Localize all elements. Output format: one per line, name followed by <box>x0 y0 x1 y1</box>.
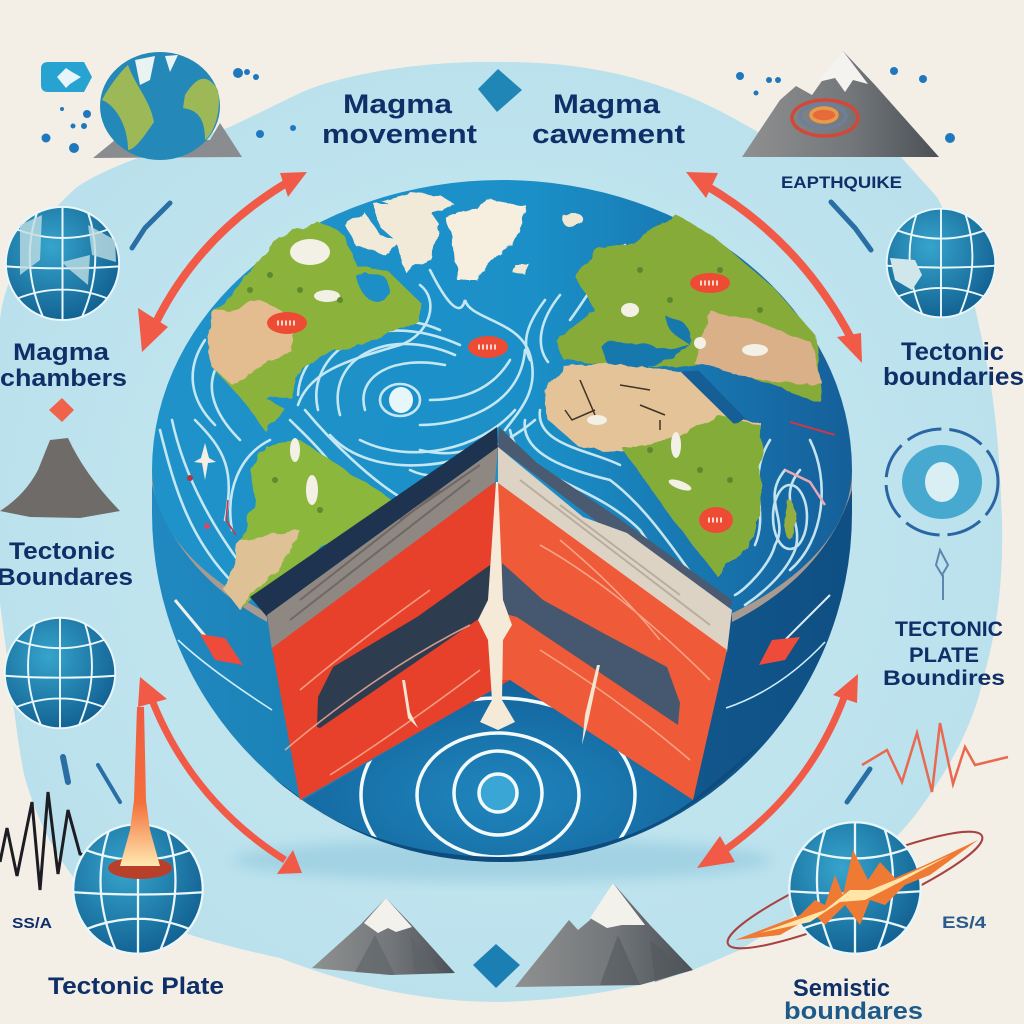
label: Magma chambers: chambers <box>0 365 127 392</box>
globe land <box>102 65 219 150</box>
label: Tectonic plate boundaries right: PLATE <box>909 644 979 667</box>
red diamond <box>49 398 74 422</box>
label: Tectonic Plate: Tectonic Plate <box>48 973 224 1000</box>
mountain <box>312 898 455 975</box>
right wall: grey strip <box>498 427 732 620</box>
faint glyphs <box>936 550 948 600</box>
globe land <box>20 215 116 285</box>
arrow: bottom right <box>697 674 858 868</box>
forest specks <box>247 267 763 513</box>
globe bottom rim <box>270 745 760 862</box>
snow cap <box>818 51 868 92</box>
Madagascar <box>784 500 796 540</box>
side fissures <box>402 665 600 745</box>
blue specks <box>736 67 955 143</box>
magma fissure <box>478 482 515 730</box>
globe land <box>890 258 922 290</box>
grey crust texture <box>290 465 480 620</box>
left wall: red mantle <box>272 482 510 800</box>
label: Magma movement: Magma <box>343 89 453 119</box>
label: Magma chambers: Magma <box>13 339 110 366</box>
North America <box>208 220 421 433</box>
top left globe with badge <box>41 52 296 160</box>
label: Tectonic Boundares left: Boundares <box>0 564 133 591</box>
Iceland <box>512 211 582 275</box>
inner globe <box>902 445 982 519</box>
hot spot marks <box>277 283 724 520</box>
globe body <box>152 470 852 862</box>
South America <box>224 440 393 610</box>
arrow: top right <box>686 172 862 363</box>
blue specks <box>42 68 296 153</box>
small red arrow left <box>175 600 243 665</box>
label: Magma movement: movement <box>322 119 477 149</box>
blue pens <box>63 202 871 802</box>
globe <box>100 52 220 160</box>
label: earthquake: EAPTHQUIKE <box>781 173 902 192</box>
left wall: grey crust <box>267 447 498 650</box>
mountain <box>0 438 120 518</box>
snow cap <box>364 898 412 933</box>
label: Magma cawement: Magma <box>553 89 661 119</box>
side current lines <box>178 640 825 710</box>
label: Tectonic boundaries right: boundaries <box>883 363 1024 391</box>
globe <box>789 822 921 954</box>
globe: left <box>6 207 119 320</box>
left wall: navy crust <box>250 427 498 618</box>
label: Semistic boundares: Semistic <box>793 975 890 1002</box>
peaks behind globe <box>93 123 242 158</box>
seismic rings <box>359 696 637 857</box>
ring target icon <box>886 429 998 535</box>
badge <box>41 62 92 92</box>
Hudson bay <box>355 274 391 302</box>
rock facet <box>355 935 440 975</box>
Asia desert <box>694 310 822 383</box>
swirl centre <box>389 387 413 413</box>
centre burst <box>925 462 959 502</box>
label: ES/A: SS/A <box>12 915 52 932</box>
diamond: bottom <box>473 944 520 988</box>
rock facet <box>600 935 690 985</box>
right wall: pale crust <box>498 447 732 652</box>
label: ES/4: ES/4 <box>942 913 987 932</box>
bolt <box>735 840 978 940</box>
globe: left lower <box>5 618 115 728</box>
Africa desert <box>544 363 761 577</box>
South America desert <box>224 530 300 610</box>
pale crust texture <box>520 480 710 625</box>
arrow: bottom left <box>138 677 302 874</box>
mountain with swirl <box>736 51 955 157</box>
Africa savanna <box>622 415 761 577</box>
label: Magma cawement: cawement <box>532 119 685 149</box>
Red Sea <box>682 372 745 425</box>
right wall: red mantle <box>498 483 727 800</box>
globe with seismic bolt <box>719 814 991 966</box>
right wall: dark layer <box>502 563 680 725</box>
shadow under globe <box>232 838 772 882</box>
left wall: dark layer <box>317 565 497 728</box>
snow cap <box>590 883 645 928</box>
mountain: bottom right <box>515 883 693 987</box>
arrow: top left <box>138 172 307 352</box>
floor of cutaway <box>303 680 693 857</box>
land cracks <box>565 380 665 430</box>
land details <box>290 239 768 505</box>
badge mark <box>57 68 81 88</box>
red hot spots <box>267 273 733 533</box>
label: Tectonic Boundares left: Tectonic <box>9 538 115 565</box>
volcano left <box>0 398 120 518</box>
orbit ring <box>719 814 991 966</box>
Mediterranean <box>600 315 691 369</box>
North America desert <box>208 300 300 385</box>
Arctic islands <box>345 192 455 272</box>
globe <box>73 824 203 954</box>
globe rim stripe <box>152 470 852 622</box>
mantle vein lines <box>285 540 710 775</box>
ocean surface <box>152 180 852 660</box>
Eurasia <box>556 213 822 403</box>
label: Tectonic plate boundaries right: TECTONIC <box>895 618 1003 641</box>
ocean markers <box>187 422 835 535</box>
globe ice <box>135 55 178 85</box>
central earth globe <box>152 180 852 892</box>
globe with eruption <box>73 707 203 954</box>
label: Tectonic boundaries right: Tectonic <box>901 338 1004 366</box>
small red arrow right <box>759 595 830 665</box>
seismograph: black <box>0 792 107 890</box>
ocean currents <box>160 245 822 605</box>
plume <box>120 707 160 866</box>
mountain <box>742 51 939 157</box>
seismograph: red <box>862 723 1008 792</box>
mountain <box>515 883 693 987</box>
crater <box>108 857 172 879</box>
mountain: bottom left <box>312 898 455 975</box>
swirl <box>792 100 858 136</box>
diamond: top <box>478 69 522 112</box>
label: Tectonic plate boundaries right: Boundires <box>883 667 1005 690</box>
outer ring <box>886 429 998 535</box>
continents <box>208 192 822 610</box>
Greenland <box>445 200 528 280</box>
globe: right <box>887 209 995 317</box>
bolt core <box>760 855 950 933</box>
